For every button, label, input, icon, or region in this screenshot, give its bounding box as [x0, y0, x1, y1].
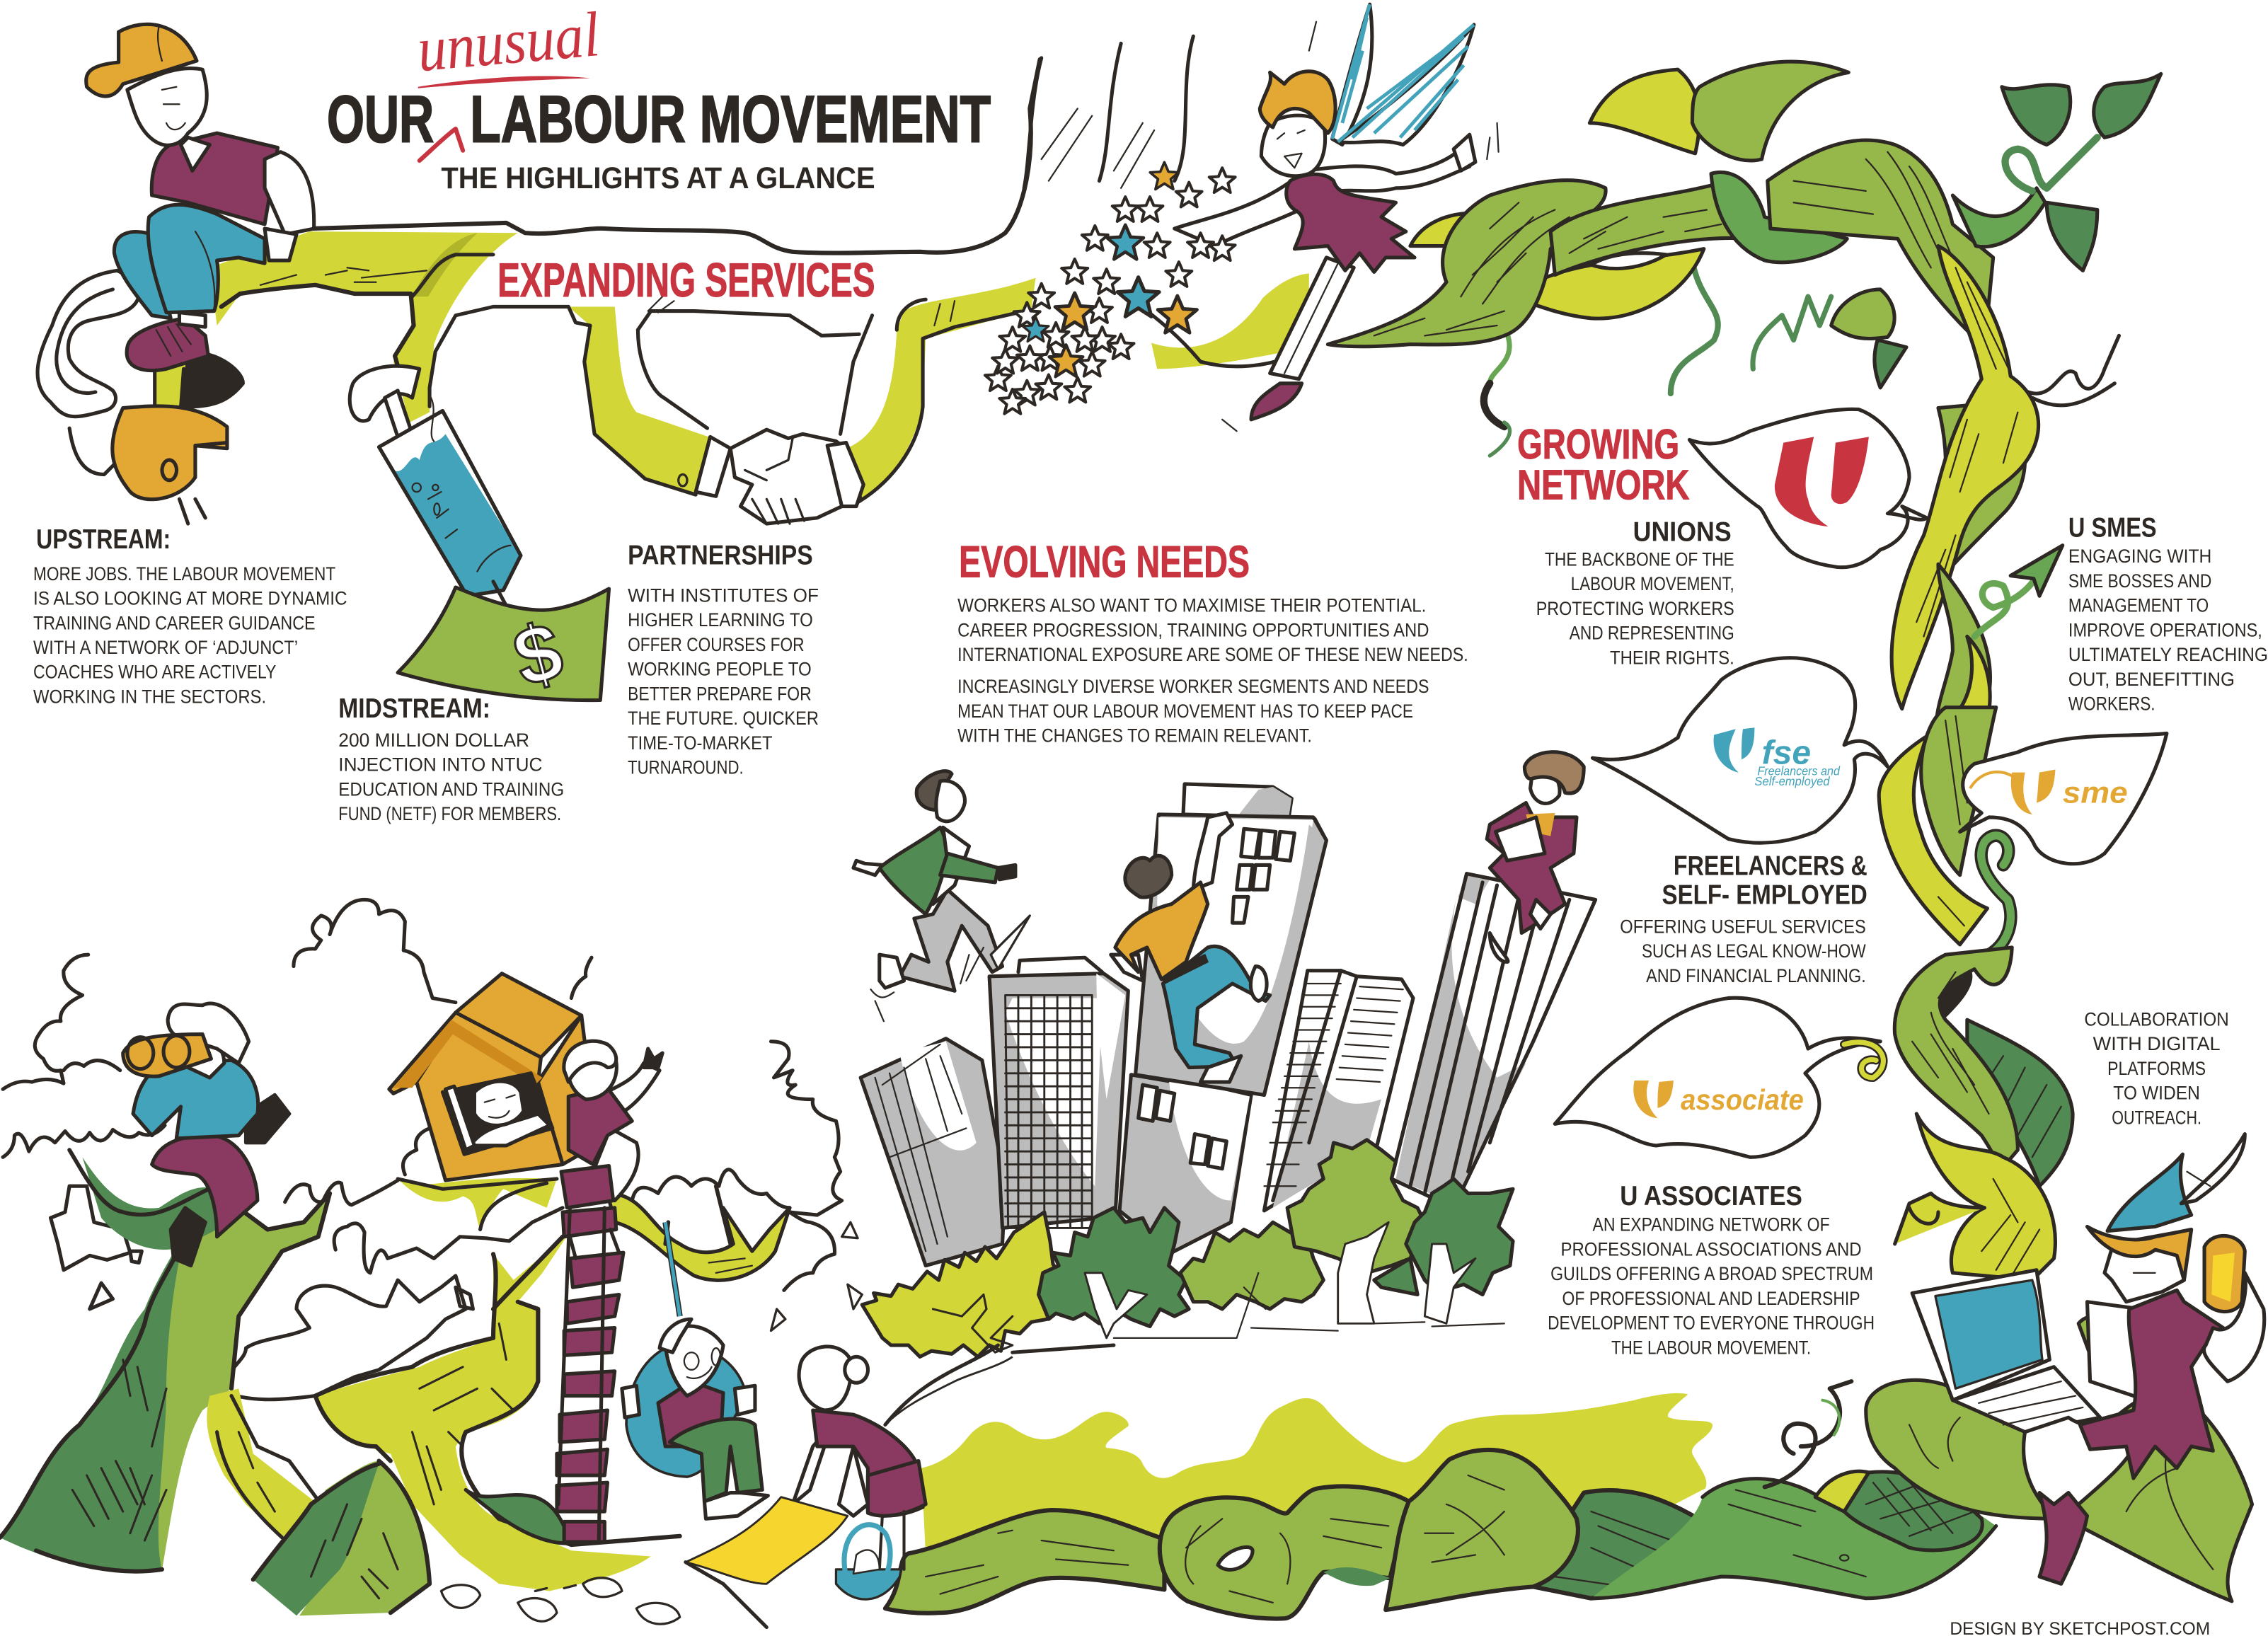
vine: top and right beanstalk: [1328, 62, 2161, 1280]
city buildings: [860, 784, 1596, 1266]
heading and text: upstream: TRAINING AND CAREER GUIDANCE: [33, 612, 316, 633]
heading and text: midstream: INJECTION INTO NTUC: [338, 754, 543, 776]
money bill with dollar sign: $: [505, 605, 572, 704]
speech leaf: associate logo: [1555, 998, 1883, 1157]
heading and text: partnerships: WORKING PEOPLE TO: [628, 659, 812, 680]
handshake: [679, 430, 863, 524]
heading and text: evolving needs: CAREER PROGRESSION, TRAINING OPPORTUNITIES AND: [957, 619, 1429, 640]
heading and text: freelancers: SELF- EMPLOYED: [1662, 880, 1867, 911]
heading and text: u associates: OF PROFESSIONAL AND LEADERSHIP: [1562, 1288, 1860, 1309]
title: LABOUR MOVEMENT: [470, 81, 991, 156]
heading and text: u associates: [1548, 1181, 1875, 1358]
fairy with stars: [1128, 4, 1499, 431]
speech leaf: fse logo: [1592, 658, 1887, 843]
heading and text: partnerships: [628, 540, 819, 778]
heading and text: evolving needs: MEAN THAT OUR LABOUR MOVEMENT HAS TO KEEP PACE: [957, 701, 1413, 722]
jumping businessman: [853, 771, 1030, 1021]
heading and text: unions: THE BACKBONE OF THE: [1545, 548, 1734, 570]
left tree with binocular watcher: [0, 899, 563, 1572]
speech leaf: sme logo: [1960, 733, 2167, 864]
heading and text: unions: [1536, 517, 1734, 668]
farmer sitting on branch: [38, 24, 314, 524]
heading and text: unions: AND REPRESENTING: [1570, 623, 1734, 644]
text: collaboration with digital platforms: PLATFORMS: [2107, 1058, 2206, 1079]
title: OUR: [327, 81, 434, 156]
text: collaboration with digital platforms: WITH DIGITAL: [2093, 1033, 2221, 1054]
heading and text: u associates: DEVELOPMENT TO EVERYONE THROUGH: [1548, 1313, 1875, 1334]
heading and text: u associates: GUILDS OFFERING A BROAD SPECTRUM: [1550, 1263, 1873, 1284]
trees in front of the city: [862, 1140, 1513, 1424]
heading and text: u associates: PROFESSIONAL ASSOCIATIONS AND: [1560, 1238, 1862, 1260]
background wash: olive ground: [921, 1393, 1712, 1555]
text: collaboration with digital platforms: COLLABORATION: [2084, 1008, 2229, 1030]
bottom vine with leaves: [885, 1381, 1996, 1619]
woman with blanket and basket: [686, 1347, 1013, 1628]
heading and text: upstream: WITH A NETWORK OF ‘ADJUNCT’: [33, 637, 298, 658]
heading and text: u smes: U SMES: [2068, 512, 2157, 543]
heading and text: midstream: MIDSTREAM:: [338, 693, 490, 724]
heading and text: partnerships: BETTER PREPARE FOR: [628, 683, 812, 704]
heading: expanding services: EXPANDING SERVICES: [497, 254, 875, 307]
speech leaf: fse logo: Freelancers and: [1757, 764, 1841, 778]
heading: growing network: [1517, 420, 1690, 508]
heading and text: partnerships: HIGHER LEARNING TO: [628, 609, 813, 630]
heading and text: upstream: COACHES WHO ARE ACTIVELY: [33, 662, 277, 683]
heading and text: u associates: AN EXPANDING NETWORK OF: [1592, 1214, 1830, 1235]
heading and text: evolving needs: INCREASINGLY DIVERSE WORKER SEGMENTS AND NEEDS: [957, 676, 1429, 697]
heading and text: evolving needs: [957, 538, 1468, 747]
heading and text: freelancers: SUCH AS LEGAL KNOW-HOW: [1642, 940, 1866, 962]
speech leaf: unions logo: [1689, 409, 1927, 568]
tree with treehouse and ladder: [253, 957, 862, 1615]
heading and text: evolving needs: EVOLVING NEEDS: [959, 538, 1250, 587]
woman on rooftop with laptop: [1487, 752, 1584, 962]
title: unusual: [415, 0, 602, 85]
heading and text: midstream: FUND (NETF) FOR MEMBERS.: [338, 803, 561, 824]
heading: growing network: GROWING: [1517, 420, 1679, 468]
text: collaboration with digital platforms: TO WIDEN: [2113, 1083, 2200, 1104]
stepping stones: [441, 1578, 680, 1624]
money bill with dollar sign: [398, 587, 609, 704]
heading and text: partnerships: TIME-TO-MARKET: [628, 732, 772, 754]
heading and text: evolving needs: WITH THE CHANGES TO REMAIN RELEVANT.: [957, 725, 1312, 747]
speech leaf: associate logo: associate: [1681, 1083, 1804, 1116]
heading and text: upstream: UPSTREAM:: [36, 524, 171, 555]
star cluster: [985, 162, 1236, 414]
heading and text: midstream: 200 MILLION DOLLAR: [338, 730, 529, 751]
speech leaf: fse logo: Self-employed: [1754, 774, 1831, 788]
heading and text: u smes: OUT, BENEFITTING: [2068, 669, 2235, 690]
text: collaboration with digital platforms: [2084, 1008, 2229, 1128]
title: [327, 0, 991, 195]
title: THE HIGHLIGHTS AT A GLANCE: [441, 161, 875, 195]
heading and text: unions: PROTECTING WORKERS: [1536, 598, 1734, 619]
heading and text: u smes: [2068, 512, 2268, 715]
swing with old man: [622, 1222, 768, 1519]
heading and text: u smes: MANAGEMENT TO: [2068, 595, 2209, 616]
heading and text: u smes: WORKERS.: [2068, 693, 2155, 715]
pan figure with laptop, phone and leaves: [1866, 1134, 2264, 1601]
top branch with syringe arm and handshake arms: [209, 36, 1193, 505]
text: collaboration with digital platforms: OUTREACH.: [2112, 1107, 2201, 1128]
heading: growing network: NETWORK: [1517, 461, 1690, 508]
heading and text: unions: LABOUR MOVEMENT,: [1571, 573, 1734, 594]
heading and text: midstream: EDUCATION AND TRAINING: [338, 778, 564, 800]
heading and text: u smes: ENGAGING WITH: [2068, 546, 2211, 567]
heading and text: freelancers: AND FINANCIAL PLANNING.: [1646, 965, 1866, 986]
heading and text: partnerships: OFFER COURSES FOR: [628, 634, 804, 655]
heading and text: u associates: U ASSOCIATES: [1620, 1181, 1802, 1211]
heading and text: upstream: [33, 524, 347, 708]
speech leaf: fse logo: fse: [1762, 733, 1811, 771]
heading and text: partnerships: THE FUTURE. QUICKER: [628, 708, 819, 729]
heading and text: unions: THEIR RIGHTS.: [1610, 647, 1734, 668]
heading and text: partnerships: TURNAROUND.: [628, 757, 744, 778]
heading and text: upstream: IS ALSO LOOKING AT MORE DYNAMIC: [33, 588, 347, 609]
syringe: [350, 366, 525, 641]
heading and text: u smes: SME BOSSES AND: [2068, 570, 2211, 592]
heading and text: partnerships: PARTNERSHIPS: [628, 540, 813, 570]
speech leaf: sme logo: sme: [2063, 776, 2128, 810]
heading and text: upstream: WORKING IN THE SECTORS.: [33, 686, 266, 708]
heading and text: midstream: [338, 693, 564, 824]
heading and text: partnerships: WITH INSTITUTES OF: [628, 584, 819, 606]
heading and text: unions: UNIONS: [1633, 517, 1732, 548]
heading and text: freelancers: OFFERING USEFUL SERVICES: [1620, 916, 1866, 937]
climbing man: [1111, 813, 1270, 1082]
heading and text: freelancers: FREELANCERS &: [1674, 851, 1867, 882]
heading and text: freelancers: [1620, 851, 1867, 986]
heading and text: upstream: MORE JOBS. THE LABOUR MOVEMENT: [33, 563, 335, 584]
heading and text: u associates: THE LABOUR MOVEMENT.: [1611, 1337, 1811, 1358]
heading and text: evolving needs: INTERNATIONAL EXPOSURE ARE SOME OF THESE NEW NEEDS.: [957, 644, 1468, 665]
heading and text: evolving needs: WORKERS ALSO WANT TO MAXIMISE THEIR POTENTIAL.: [957, 595, 1426, 616]
